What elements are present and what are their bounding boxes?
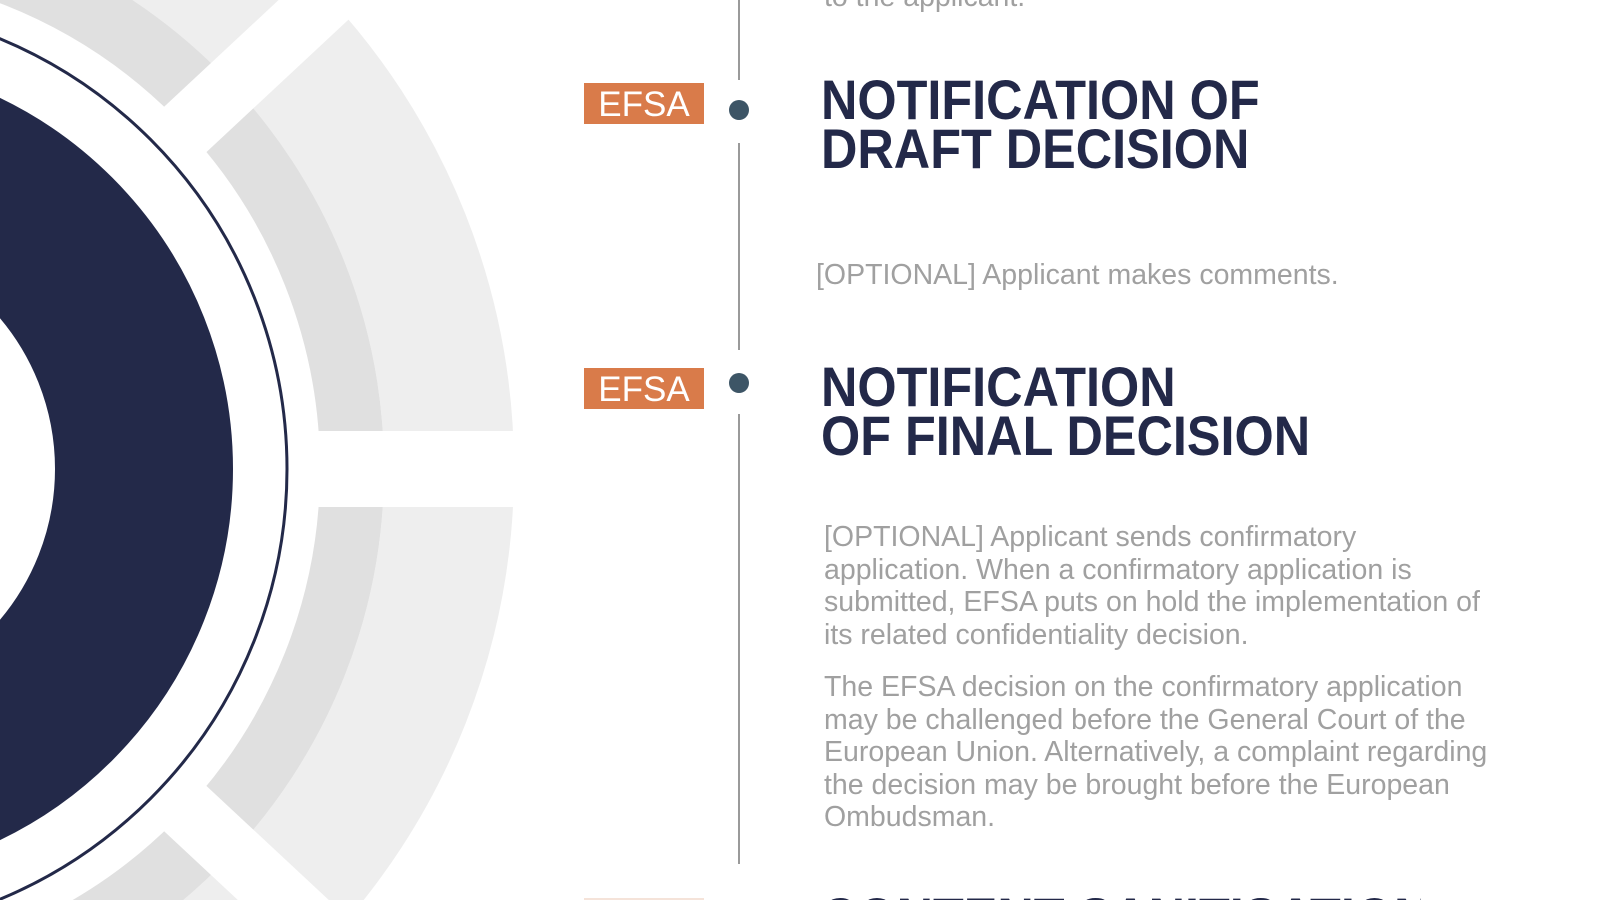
timeline line bbox=[738, 0, 740, 864]
heading: notification of draft decision bbox=[821, 68, 1260, 180]
heading: notification of draft decision: DRAFT DECISION bbox=[821, 117, 1249, 180]
badge: partial bottom bbox=[584, 898, 704, 900]
text: court and ombudsman: may be challenged before the General Court of the bbox=[824, 704, 1466, 736]
text: court and ombudsman: Ombudsman. bbox=[824, 801, 995, 833]
heading: notification of final decision: NOTIFICATION bbox=[821, 355, 1176, 418]
text: confirmatory application: application. When a confirmatory application is bbox=[824, 554, 1412, 586]
text: confirmatory application bbox=[824, 521, 1480, 650]
badge: EFSA 2: EFSA bbox=[598, 370, 690, 409]
text: court and ombudsman bbox=[824, 671, 1487, 833]
text: confirmatory application: submitted, EFSA puts on hold the implementation of bbox=[824, 586, 1480, 618]
thin outer ring bbox=[0, 3, 287, 900]
outer light segments bbox=[0, 0, 700, 900]
text: confirmatory application: [OPTIONAL] Applicant sends confirmatory bbox=[824, 521, 1356, 553]
text: optional comments: [OPTIONAL] Applicant makes comments. bbox=[816, 259, 1339, 291]
dot 1 bbox=[729, 100, 749, 120]
text: court and ombudsman: the decision may be brought before the European bbox=[824, 768, 1450, 800]
text: court and ombudsman: The EFSA decision on the confirmatory application bbox=[824, 671, 1462, 703]
heading: notification of draft decision: NOTIFICATION OF bbox=[821, 68, 1260, 131]
heading: notification of final decision bbox=[821, 355, 1310, 467]
text: confirmatory application: its related confidentiality decision. bbox=[824, 618, 1249, 650]
text: court and ombudsman: European Union. Alternatively, a complaint regarding bbox=[824, 736, 1487, 768]
dark ring bbox=[0, 146, 144, 792]
dot 2 bbox=[729, 373, 749, 393]
heading: notification of final decision: OF FINAL DECISION bbox=[821, 404, 1310, 467]
badge: EFSA 1: EFSA bbox=[598, 85, 690, 124]
